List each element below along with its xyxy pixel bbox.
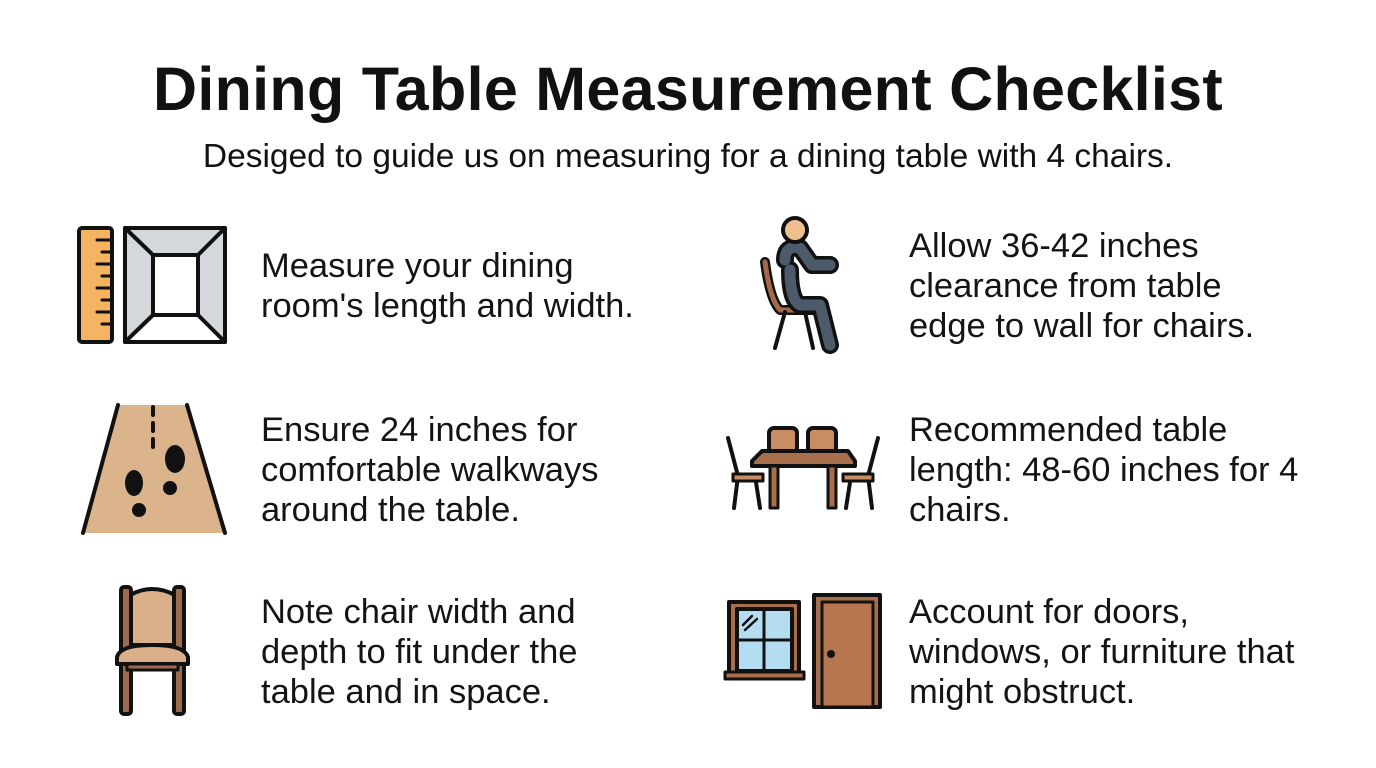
text: table length: chairs. <box>909 491 1011 529</box>
title: Dining Table Measurement Checklist <box>153 55 1223 123</box>
text: clearance: clearance from table <box>909 267 1222 305</box>
text: measure room: room's length and width. <box>261 287 634 325</box>
text: clearance: Allow 36-42 inches <box>909 227 1199 265</box>
icon: table with chairs <box>728 428 878 508</box>
subtitle: Desiged to guide us on measuring for a dining table with 4 chairs. <box>203 138 1173 175</box>
text: table length <box>909 411 1298 529</box>
text: table length: length: 48-60 inches for 4 <box>909 451 1298 489</box>
text: walkways: comfortable walkways <box>261 451 598 489</box>
icon: walkway footprints <box>83 405 225 533</box>
text: obstructions: windows, or furniture that <box>909 633 1294 671</box>
text: chair width <box>261 593 577 711</box>
icon: window and door <box>725 595 880 707</box>
text: chair width: depth to fit under the <box>261 633 577 671</box>
text: walkways: Ensure 24 inches for <box>261 411 577 449</box>
text: obstructions <box>909 593 1294 711</box>
text: chair width: table and in space. <box>261 673 551 711</box>
text: walkways: around the table. <box>261 491 520 529</box>
icon: seated person <box>765 218 830 348</box>
text: measure room: Measure your dining <box>261 247 574 285</box>
icon: chair <box>117 587 188 714</box>
text: obstructions: Account for doors, <box>909 593 1189 631</box>
text: measure room <box>261 247 634 325</box>
text: table length: Recommended table <box>909 411 1227 449</box>
icon: ruler and room <box>79 228 225 342</box>
text: clearance <box>909 227 1254 345</box>
text: chair width: Note chair width and <box>261 593 576 631</box>
text: clearance: edge to wall for chairs. <box>909 307 1254 345</box>
text: walkways <box>261 411 598 529</box>
text: obstructions: might obstruct. <box>909 673 1135 711</box>
